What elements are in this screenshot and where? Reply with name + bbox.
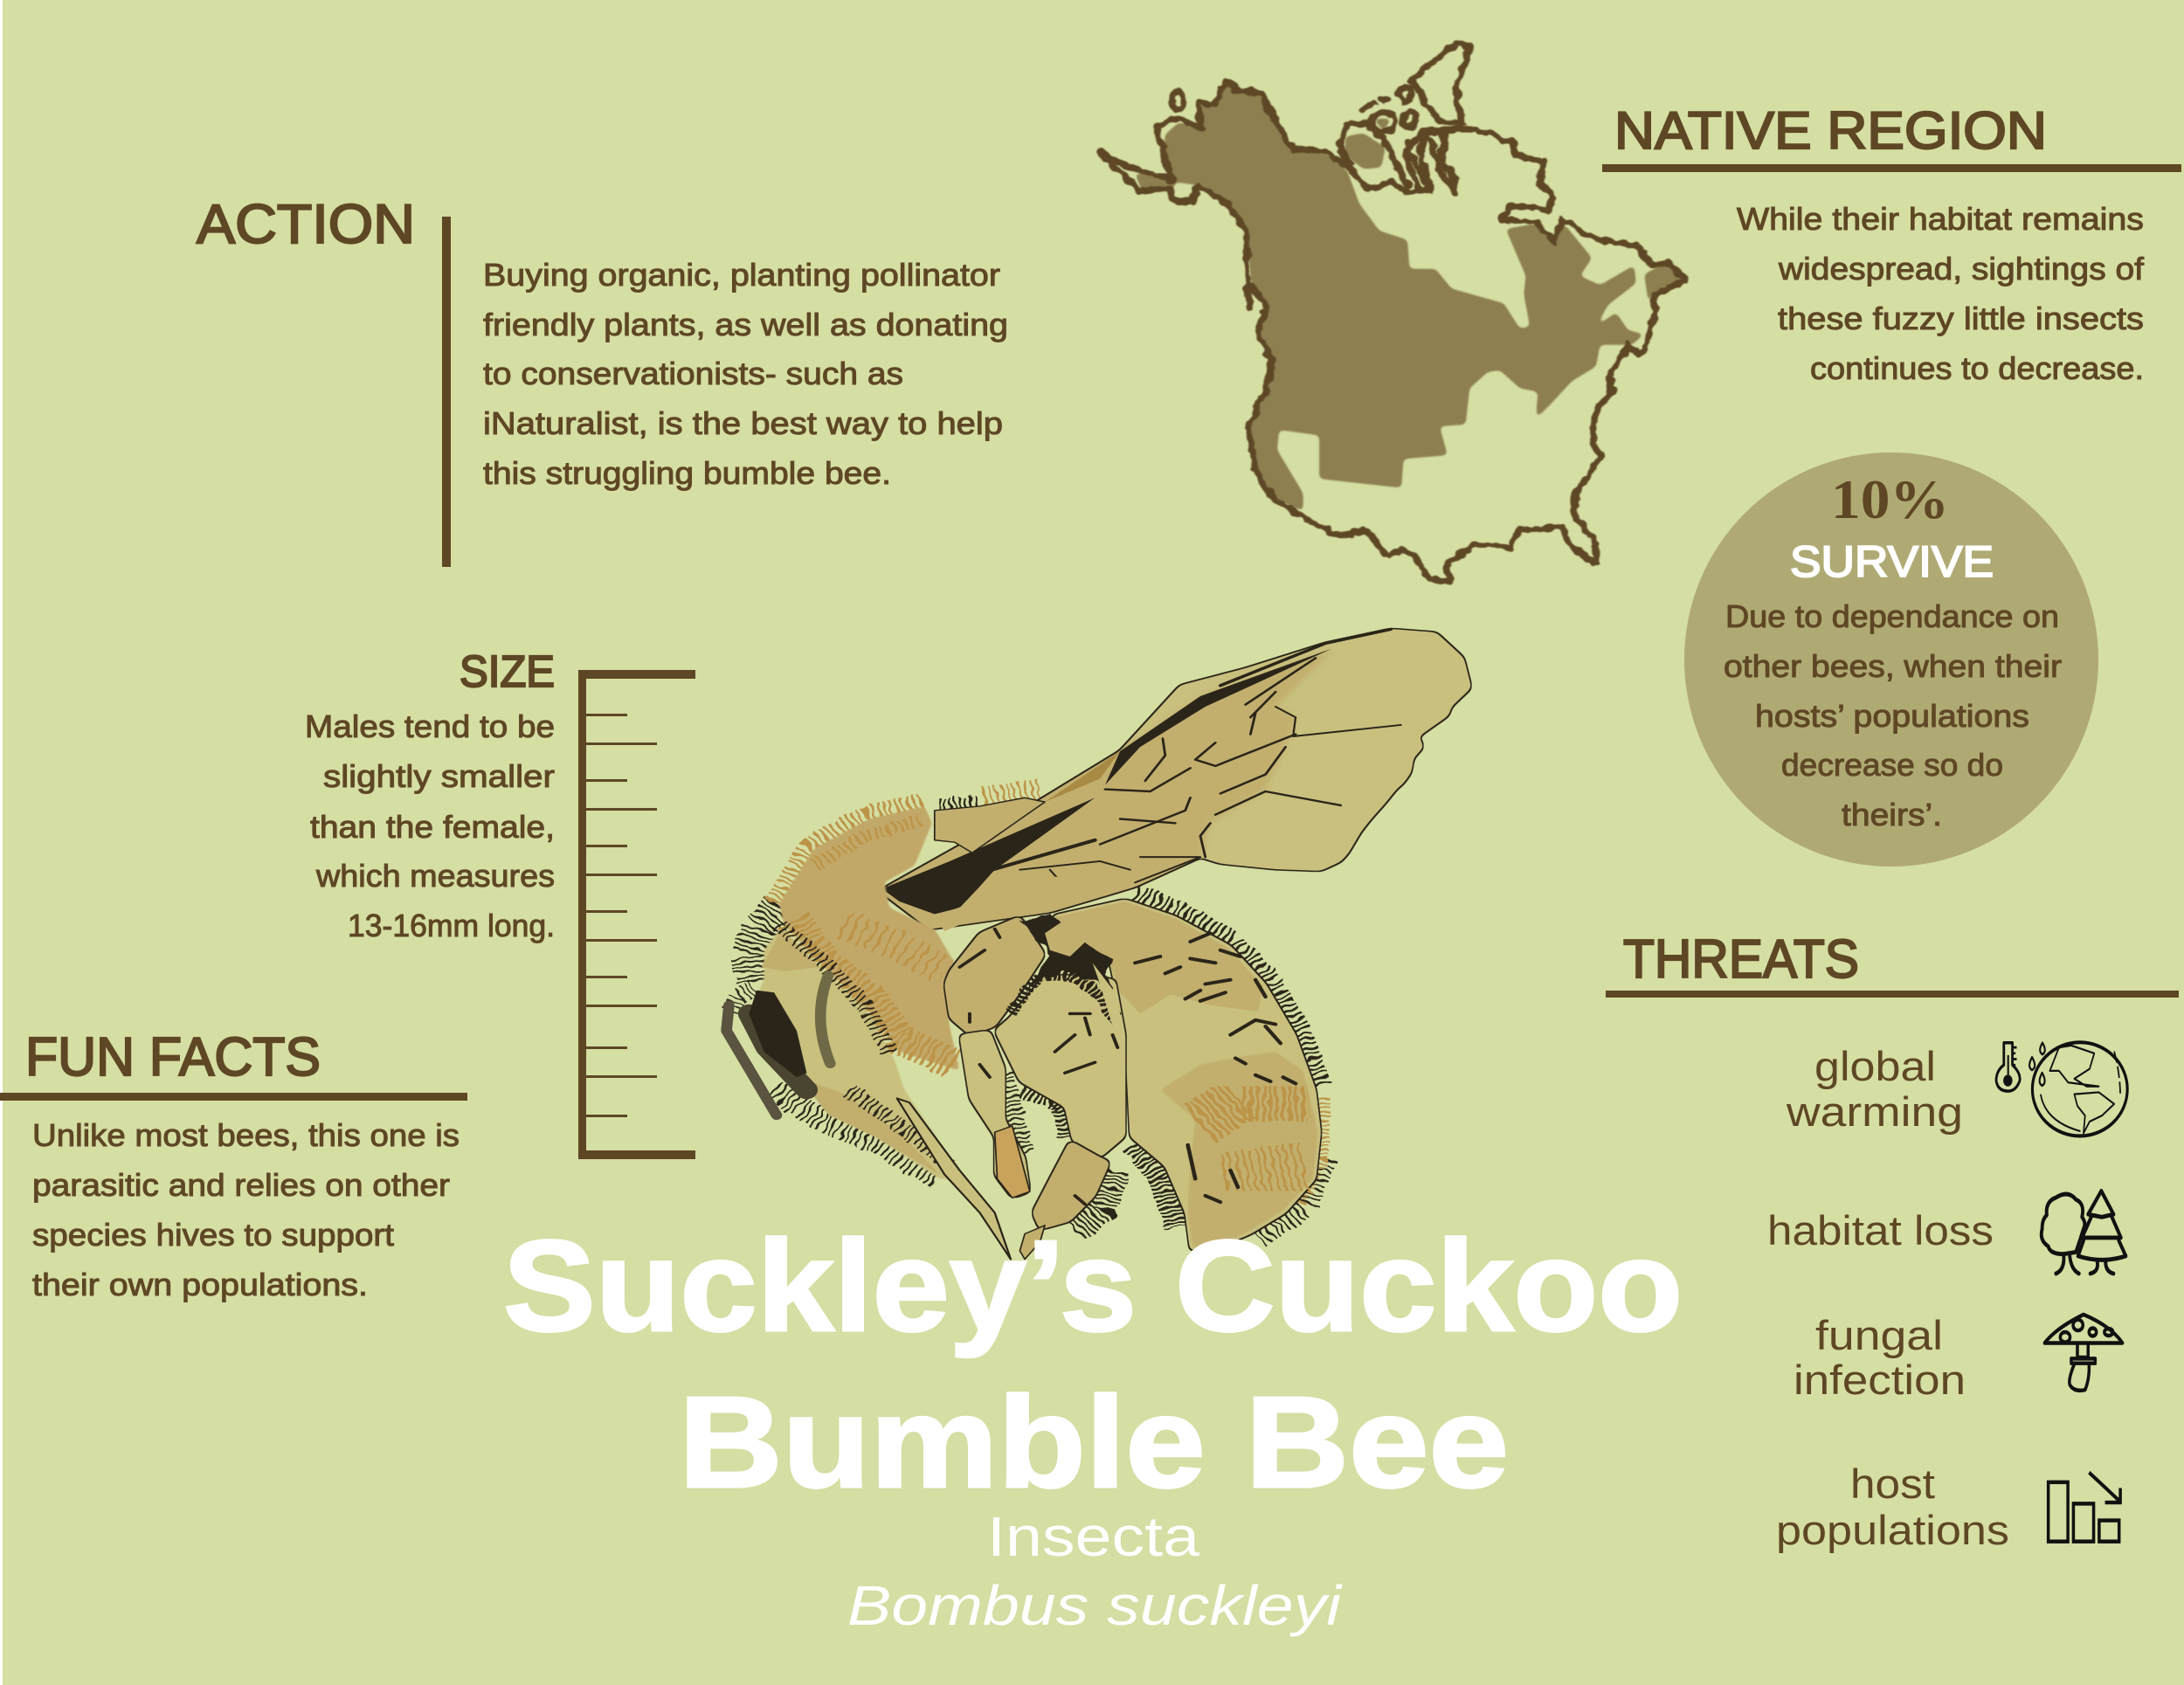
threat: global warming: global	[1814, 1043, 1936, 1089]
fun facts text	[32, 1117, 460, 1302]
native region text: continues to decrease.	[1810, 350, 2144, 386]
wing base dark wedge	[882, 798, 1095, 915]
thorax fur	[779, 806, 959, 1071]
panel: threats	[1606, 929, 2179, 1553]
gray ocular stripe	[820, 976, 830, 1064]
joint hair shadow	[1010, 976, 1117, 1025]
head tan crown	[762, 929, 819, 971]
head dark hairs	[779, 925, 950, 1166]
coastline	[1099, 43, 1686, 582]
mid tarsus	[1019, 1226, 1045, 1260]
heading: size: SIZE	[460, 646, 555, 696]
abdomen dark hair marks	[1135, 933, 1296, 1202]
callout text: Due to dependance on	[1725, 598, 2059, 634]
subtitle: class: Insecta	[987, 1505, 1199, 1568]
callout heading: SURVIVE	[1790, 537, 1994, 586]
foreleg tarsus	[995, 1126, 1030, 1198]
size text: slightly smaller	[323, 758, 555, 794]
icon: thermometer and globe	[1996, 1042, 2127, 1136]
size text: 13-16mm long.	[348, 908, 555, 943]
mid femur	[1033, 1141, 1110, 1230]
wing leading edge sliver	[1105, 649, 1331, 785]
threat: fungal infection: infection	[1794, 1357, 1966, 1403]
wing base lower vein	[992, 840, 1095, 870]
panel: size	[305, 646, 695, 1159]
icon: mushroom	[2044, 1315, 2123, 1391]
thick dark joint	[1019, 915, 1113, 992]
heading: threats: THREATS	[1623, 929, 1859, 990]
native region rule	[1602, 164, 2181, 172]
action text: this struggling bumble bee.	[483, 455, 891, 491]
proboscis	[897, 1098, 1011, 1260]
fun facts text: Unlike most bees, this one is	[32, 1117, 460, 1153]
lower foreleg	[959, 1031, 1030, 1198]
threat: host populations: populations	[1776, 1507, 2009, 1553]
panel: fun facts	[0, 1027, 467, 1302]
abdomen	[1050, 900, 1321, 1251]
action text: friendly plants, as well as donating	[483, 307, 1008, 342]
wing veins	[1019, 629, 1401, 887]
thorax orange tufts	[794, 821, 955, 1065]
head tan lower	[799, 1077, 940, 1175]
panel: action	[197, 194, 1008, 567]
action text: to conservationists- such as	[483, 356, 903, 391]
native region text: these fuzzy little insects	[1778, 300, 2144, 336]
dark hair fringes	[731, 805, 1321, 1234]
heading: action: ACTION	[197, 194, 415, 255]
callout: 10% survive	[1684, 452, 2098, 867]
joint tan patch	[1045, 916, 1090, 956]
ruler	[578, 670, 695, 1159]
size text: which measures	[315, 858, 555, 894]
icon: declining bars	[2049, 1473, 2120, 1542]
map: native range of North America	[1099, 43, 1689, 582]
heading: native region: NATIVE REGION	[1614, 101, 2047, 160]
threat: global warming	[1786, 1043, 1963, 1135]
threats rule	[1606, 991, 2179, 998]
fun facts text: their own populations.	[32, 1267, 368, 1302]
wing stigma	[1045, 751, 1120, 802]
wing base underside	[935, 874, 1130, 931]
abdomen tan band	[1050, 901, 1263, 1013]
panel: native region	[1602, 101, 2181, 386]
head	[749, 927, 959, 1178]
size text: than the female,	[310, 809, 555, 845]
fun facts text: parasitic and relies on other	[32, 1167, 450, 1203]
callout text	[1724, 598, 2062, 832]
wing membranes	[880, 629, 1471, 929]
face band	[749, 1013, 806, 1090]
leg marks	[959, 929, 1117, 1205]
icon: trees	[2042, 1191, 2125, 1274]
illustration: bumble bee	[727, 629, 1471, 1260]
wing base pale panel	[999, 811, 1095, 869]
action text: iNaturalist, is the best way to help	[483, 405, 1003, 441]
native region text	[1737, 201, 2145, 386]
subtitle: scientific name: Bombus suckleyi	[847, 1574, 1343, 1637]
callout text: hosts’ populations	[1755, 698, 2029, 734]
action text	[483, 257, 1008, 491]
heading: fun facts: FUN FACTS	[25, 1027, 321, 1088]
title line one: Suckley’s Cuckoo	[503, 1214, 1683, 1358]
threat: host populations: host	[1850, 1461, 1935, 1507]
threat: host populations	[1776, 1461, 2009, 1553]
callout text: other bees, when their	[1724, 648, 2062, 684]
hind leg edge	[1093, 963, 1125, 1035]
number: 10%: 10%	[1831, 468, 1949, 530]
callout text: theirs’.	[1842, 797, 1942, 832]
threat: global warming: warming	[1786, 1088, 1963, 1135]
middle leg coxa	[995, 976, 1125, 1157]
threat: fungal infection	[1794, 1312, 1966, 1403]
fun facts text: species hives to support	[32, 1217, 394, 1253]
size text: Males tend to be	[305, 708, 555, 744]
threat: fungal infection: fungal	[1815, 1312, 1943, 1358]
orange fur fringes	[782, 791, 1321, 1205]
compound eye	[749, 991, 806, 1077]
action vertical bar	[442, 217, 451, 567]
title line two: Bumble Bee	[679, 1371, 1509, 1515]
fun facts rule	[0, 1093, 467, 1101]
title	[503, 1214, 1683, 1637]
native region text: widespread, sightings of	[1778, 251, 2145, 287]
front leg	[944, 916, 1045, 1035]
native region text: While their habitat remains	[1737, 201, 2144, 237]
size text	[305, 708, 555, 943]
antenna	[727, 1005, 777, 1115]
tegula fur	[935, 798, 1045, 853]
abdomen rear band	[1160, 1052, 1318, 1248]
callout text: decrease so do	[1781, 747, 2003, 783]
action text: Buying organic, planting pollinator	[483, 257, 1000, 293]
threat: habitat loss: habitat loss	[1767, 1207, 1994, 1253]
range area	[1135, 84, 1689, 511]
rump orange hair	[1200, 1098, 1308, 1178]
callout circle	[1684, 452, 2098, 867]
